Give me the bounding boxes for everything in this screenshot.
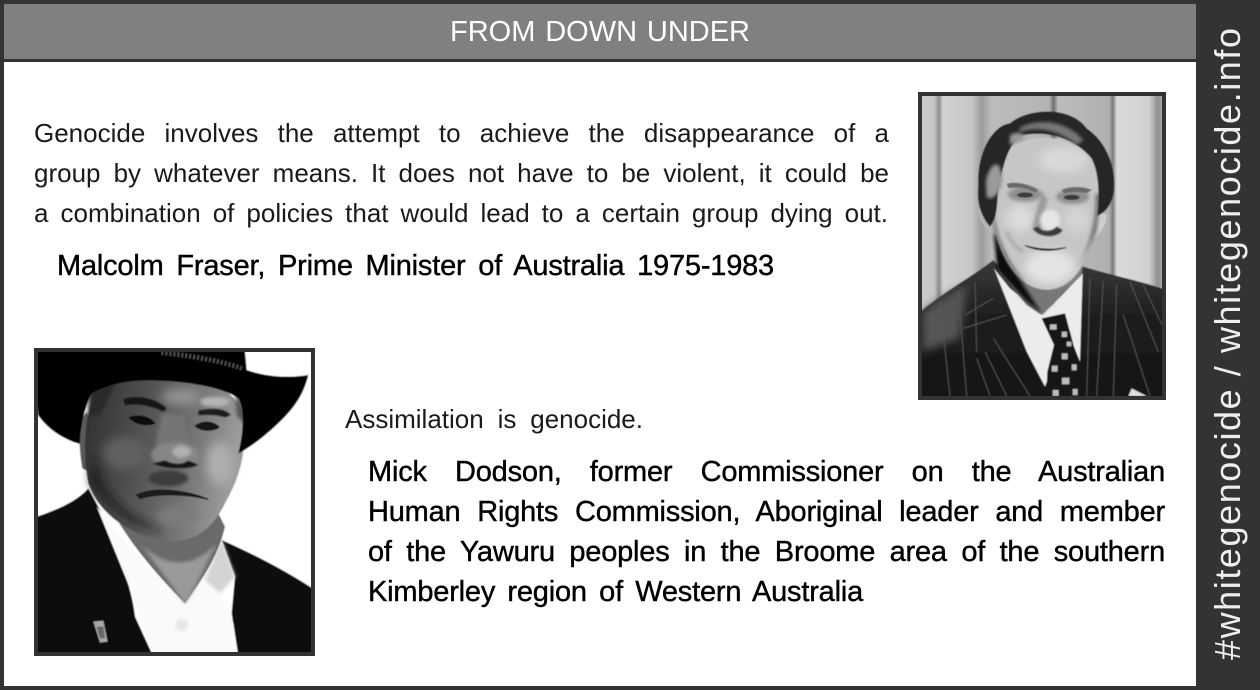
attribution: Mick Dodson: Human Rights Commission, Aboriginal leader and member: [368, 496, 1165, 528]
attribution: Malcolm Fraser: Malcolm Fraser, Prime Minister of Australia 1975-1983: [57, 250, 774, 282]
quote: Malcolm Fraser: Genocide involves the attempt to achieve the disappearance of a: [34, 118, 889, 148]
quote: Malcolm Fraser: group by whatever means. It does not have to be violent, it could be: [34, 158, 889, 188]
title: FROM DOWN UNDER: [450, 16, 750, 48]
sidebar: website and hashtag: #whitegenocide / whitegenocide.info: [1207, 28, 1248, 660]
quote: Malcolm Fraser: [34, 118, 889, 228]
header bar: [4, 4, 1196, 59]
attribution: Mick Dodson: Kimberley region of Western Australia: [368, 576, 863, 608]
photo: Malcolm Fraser portrait: [918, 92, 1166, 400]
attribution: Mick Dodson: Mick Dodson, former Commissioner on the Australian: [368, 456, 1165, 488]
attribution: Mick Dodson: of the Yawuru peoples in the Broome area of the southern: [368, 536, 1165, 568]
attribution: Mick Dodson: [368, 456, 1165, 608]
quote: Malcolm Fraser: a combination of policies that would lead to a certain group dying out.: [34, 198, 888, 228]
photo: Mick Dodson portrait: [34, 348, 315, 656]
quote: Mick Dodson: Assimilation is genocide.: [345, 404, 643, 434]
